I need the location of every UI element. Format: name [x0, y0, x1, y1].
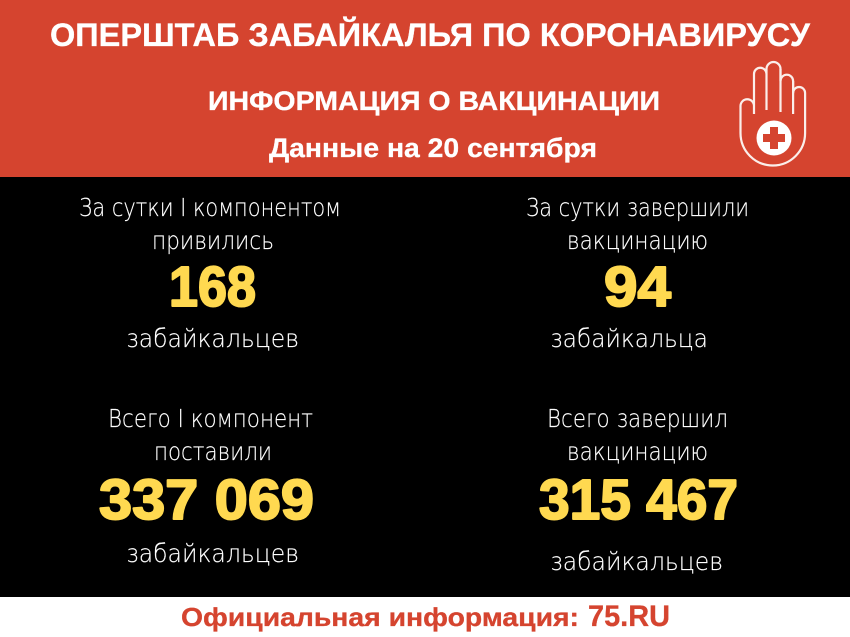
text: unit: забайкальцев — [126, 324, 299, 353]
text: label: За сутки I компонентом — [79, 193, 341, 222]
panel: total first component — [99, 404, 314, 568]
panel: header — [0, 0, 850, 177]
number: 315 467: 315 467 — [539, 468, 738, 532]
footer link: 75.RU — [588, 600, 670, 633]
text: unit: забайкальцев — [126, 539, 299, 568]
footer text: Официальная информация: — [181, 602, 579, 632]
number: 168: 168 — [169, 255, 256, 319]
text: label: Всего завершил — [547, 404, 728, 433]
text: unit: забайкальца — [550, 324, 708, 353]
text: unit: забайкальцев — [550, 547, 723, 576]
icon: hand with medical cross — [740, 62, 805, 166]
number: 337 069: 337 069 — [99, 468, 314, 532]
panel: footer — [0, 597, 850, 637]
title: ОПЕРШТАБ ЗАБАЙКАЛЬЯ ПО КОРОНАВИРУСУ — [50, 17, 811, 53]
panel: daily first component: привились — [152, 226, 274, 255]
panel: total first component: поставили — [154, 437, 272, 466]
number: 94: 94 — [604, 255, 671, 319]
panel: total completed — [539, 404, 738, 576]
text: label: За сутки завершили — [526, 193, 749, 222]
text: label: Всего I компонент — [108, 404, 313, 433]
panel: daily completed: вакцинацию — [567, 226, 708, 255]
date line: Данные на 20 сентября — [269, 133, 597, 163]
panel: daily completed — [526, 193, 749, 353]
subtitle: ИНФОРМАЦИЯ О ВАКЦИНАЦИИ — [208, 86, 660, 116]
panel: daily first component — [79, 193, 341, 353]
panel: total completed: вакцинацию — [567, 437, 708, 466]
